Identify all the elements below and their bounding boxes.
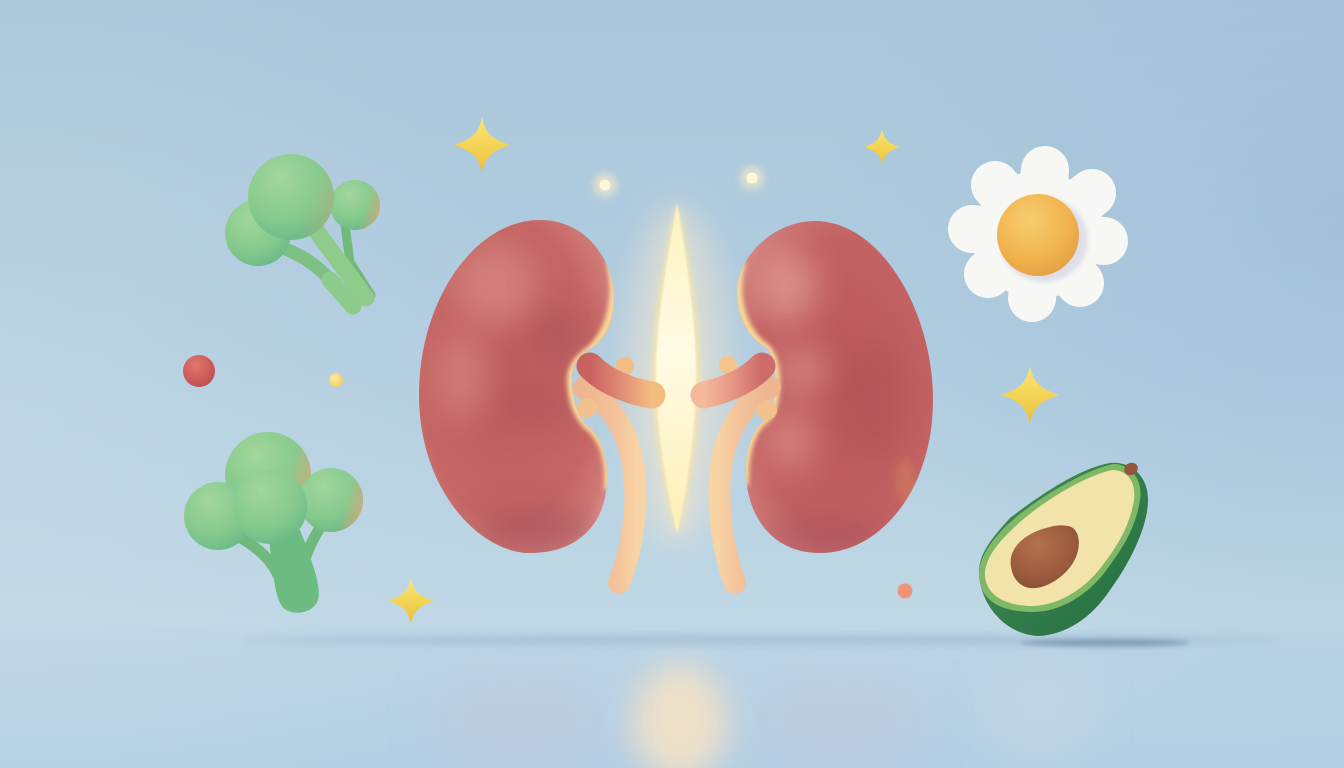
icon: lower broccoli (184, 432, 363, 613)
icon: sparkle stars (388, 117, 1059, 624)
icon: fried egg flower (972, 170, 1104, 299)
right ureter and renal vessel (704, 356, 777, 583)
left kidney (419, 220, 614, 553)
icon: avocado (979, 460, 1148, 636)
floor shadow and reflections (240, 635, 1280, 768)
icon: upper broccoli (225, 154, 380, 306)
right kidney (737, 221, 933, 553)
glow dots (593, 166, 764, 197)
central light beam (627, 203, 727, 545)
decorative small spheres (183, 355, 912, 598)
left ureter and renal vessel (577, 357, 652, 583)
